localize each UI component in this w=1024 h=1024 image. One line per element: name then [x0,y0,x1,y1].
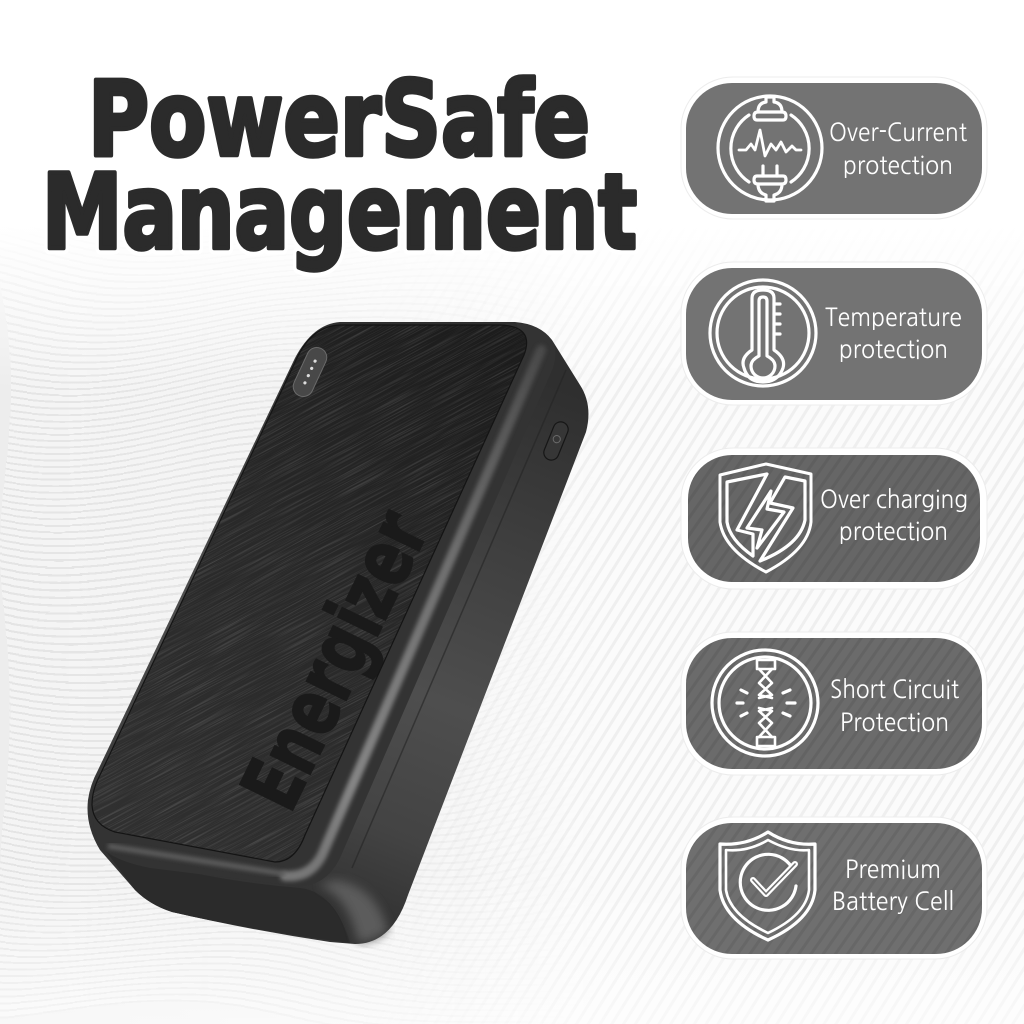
label [820,487,968,544]
label: Premium [845,857,941,882]
title ink: Management: Management [42,153,637,273]
label [832,857,954,914]
label: Protection [840,710,949,735]
label: Over-Current [829,120,967,145]
brushed top face [94,326,526,861]
rim seam line [352,370,566,868]
label: protection [843,153,953,178]
panel: Over-Current protection [681,77,987,219]
rim band [92,323,556,886]
face edge [92,325,527,862]
panel: Short Circuit Protection [681,632,987,775]
icon: shield with check [720,832,815,940]
rim highlight [285,350,541,876]
USB port [290,344,330,400]
front side shading [105,850,350,943]
label: protection [839,337,948,362]
panel: Temperature protection [681,262,987,405]
rim bottom highlight [108,846,285,874]
power bank product [88,322,588,948]
logo: Energizer [223,496,447,823]
corner highlight [318,880,388,942]
title [42,60,637,273]
label [830,677,959,735]
label: Over charging [820,487,968,512]
icon: broken wire [712,650,818,756]
device body silhouette [88,322,588,944]
label: Battery Cell [832,889,954,914]
icon: plug and pulse [718,96,822,201]
panel: Over charging protection [681,448,987,589]
label: Short Circuit [830,677,959,702]
icon: shield with lightning [720,464,811,572]
label [825,305,962,362]
title halo: Management: Management [42,153,637,273]
label: Temperature [825,305,962,330]
panel: Premium Battery Cell [681,817,987,959]
background [0,305,1024,1002]
title halo: PowerSafe: PowerSafe [88,60,590,180]
label [829,120,967,178]
icon: thermometer [710,280,816,386]
title ink: PowerSafe: PowerSafe [88,60,590,180]
power button [542,420,570,462]
label: protection [839,519,948,544]
